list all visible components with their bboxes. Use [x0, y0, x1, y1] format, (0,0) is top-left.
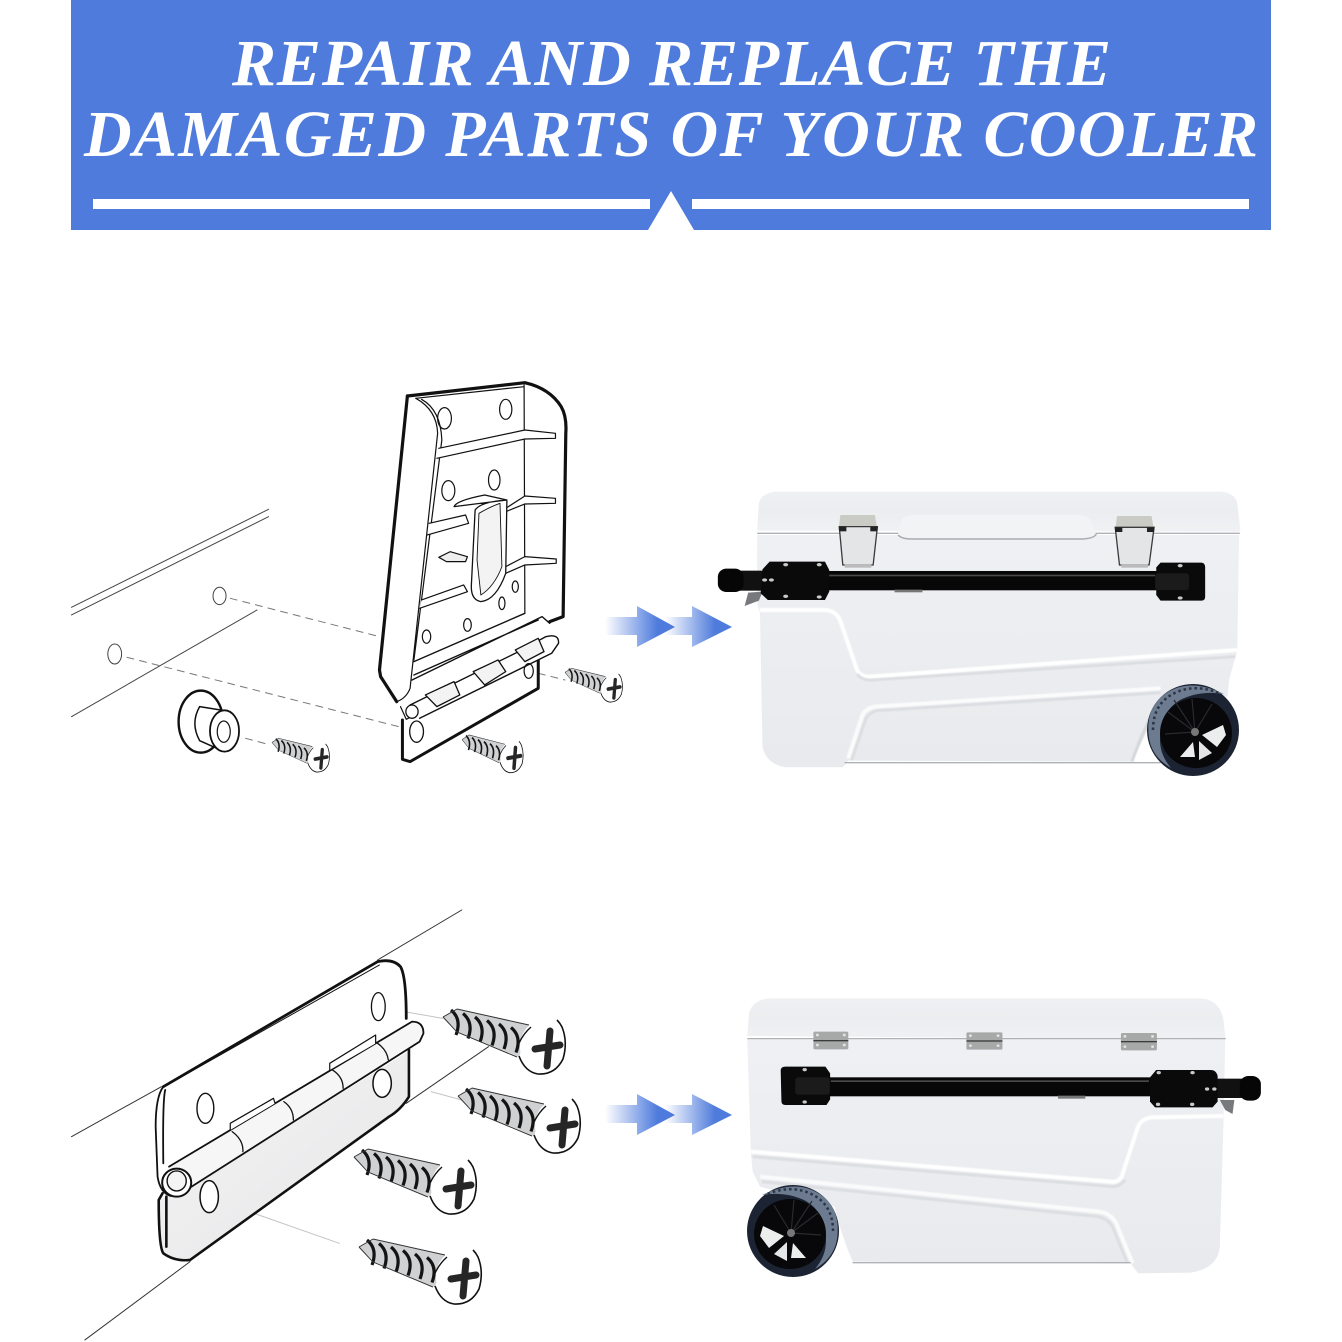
telescoping tow handle	[718, 562, 1205, 606]
latch left	[839, 515, 877, 568]
cooler wall lines and mounting holes	[71, 509, 565, 745]
diagram: latch bracket exploded view	[71, 383, 566, 762]
wheel: second cooler	[747, 1185, 839, 1277]
large screws: hinge fasteners	[354, 1009, 581, 1304]
cooler lid	[757, 492, 1240, 532]
latch right	[1115, 516, 1154, 568]
lid seam and base shadow	[747, 1039, 1226, 1263]
telescoping tow handle	[781, 1067, 1261, 1114]
cooler lid	[747, 998, 1226, 1039]
header banner	[71, 0, 1271, 230]
moulded ridges	[751, 1116, 1223, 1263]
cooler photo: rear with hinges and handle	[747, 998, 1261, 1273]
rubber bushing	[179, 691, 239, 753]
cooler photo: front with latches and handle	[718, 492, 1240, 767]
hinge centre	[966, 1032, 1002, 1050]
wheel: first cooler	[1147, 684, 1239, 776]
title: DAMAGED PARTS OF YOUR COOLER	[83, 98, 1258, 171]
title: REPAIR AND REPLACE THE	[231, 27, 1111, 100]
hinge plate	[156, 961, 423, 1260]
small screws: bracket fasteners	[272, 668, 623, 773]
arrows: top row	[605, 606, 732, 647]
title	[83, 27, 1258, 171]
wall lines and guide lines	[71, 910, 489, 1340]
diagram: hinge exploded view	[71, 910, 489, 1340]
hinge left	[813, 1032, 848, 1049]
lid handle recess	[898, 515, 1096, 539]
moulded ridges	[760, 610, 1237, 762]
bracket body	[379, 383, 566, 762]
cooler body shell	[747, 1040, 1225, 1273]
cooler body shell	[757, 535, 1239, 767]
hinge right	[1121, 1033, 1157, 1050]
lid seam and base shadow	[757, 533, 1240, 763]
arrows: bottom row	[605, 1094, 732, 1135]
